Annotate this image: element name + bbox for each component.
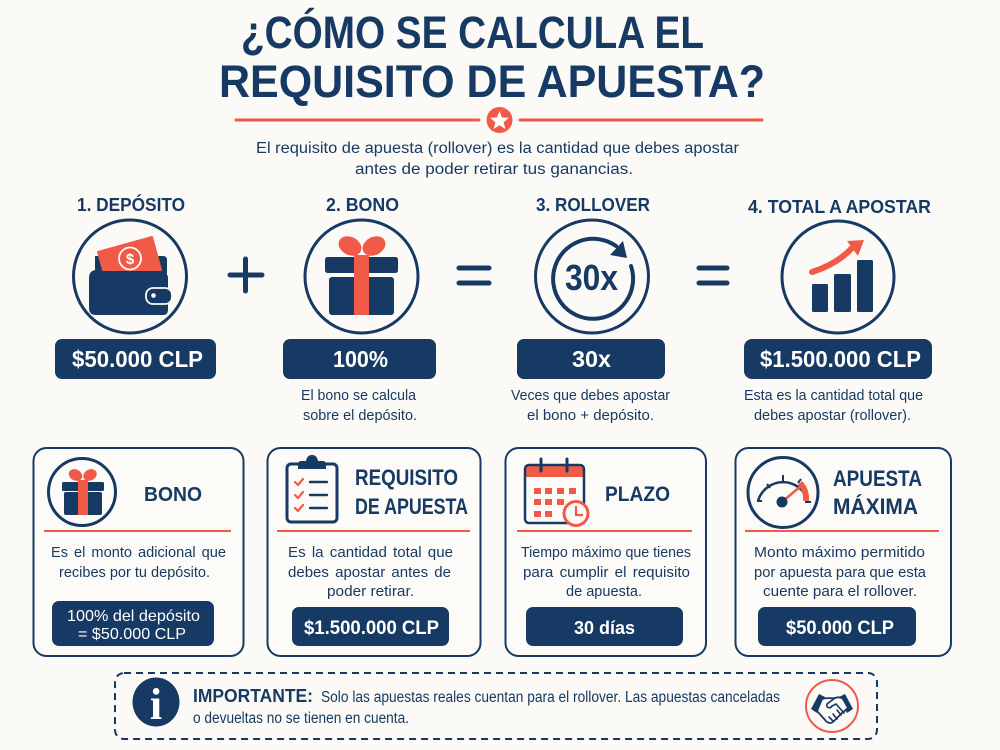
important text bbox=[193, 686, 780, 727]
step 1 value pill bbox=[55, 339, 216, 379]
step 4 caption bbox=[744, 387, 923, 424]
card text: plazo: de apuesta. bbox=[566, 583, 642, 600]
step 3: rollover bbox=[511, 195, 670, 424]
card text: requisito de apuesta bbox=[288, 544, 453, 600]
icon: gauge bbox=[748, 458, 818, 528]
step 2 heading: 2. BONO bbox=[326, 195, 399, 215]
card value pill: requisito: $1.500.000 CLP bbox=[304, 618, 439, 639]
equals sign 2 bbox=[699, 268, 727, 283]
card heading: apuesta máxima: APUESTA bbox=[833, 466, 922, 491]
step 1 heading: 1. DEPÓSITO bbox=[77, 194, 185, 215]
card text: apuesta máxima bbox=[754, 544, 927, 600]
card text: plazo bbox=[521, 544, 691, 600]
step 4 value pill bbox=[744, 339, 932, 379]
important text: Solo las apuestas reales cuentan para el rollover. Las apuestas canceladas bbox=[321, 689, 780, 706]
step 1: depósito bbox=[55, 194, 216, 379]
card text: apuesta máxima: por apuesta para que esta bbox=[754, 564, 927, 581]
icon: calendar with clock bbox=[525, 459, 588, 526]
title: REQUISITO DE APUESTA? bbox=[219, 56, 765, 107]
card heading: apuesta máxima: MÁXIMA bbox=[833, 494, 918, 519]
panel: requisito de apuesta bbox=[268, 448, 480, 656]
step 4 heading: 4. TOTAL A APOSTAR bbox=[748, 197, 931, 217]
icon: growth chart bbox=[782, 221, 894, 333]
intro text: antes de poder retirar tus ganancias. bbox=[355, 161, 633, 178]
card text: bono bbox=[51, 544, 226, 581]
card heading: requisito de apuesta: REQUISITO bbox=[355, 465, 458, 490]
card value pill: bono: 100% del depósito bbox=[67, 608, 200, 625]
step 4 caption: Esta es la cantidad total que bbox=[744, 387, 923, 404]
card text: apuesta máxima: cuente para el rollover. bbox=[763, 583, 917, 600]
step 2 caption: El bono se calcula bbox=[301, 387, 417, 404]
card value pill: apuesta máxima bbox=[758, 607, 916, 646]
card text: requisito de apuesta: Es la cantidad total que bbox=[288, 544, 453, 561]
icon: info: i bbox=[150, 680, 162, 729]
card text: requisito de apuesta: poder retirar. bbox=[327, 583, 414, 600]
important text: IMPORTANTE: bbox=[193, 686, 313, 706]
step 2 value pill: 100% bbox=[333, 346, 388, 372]
icon: rollover 30x bbox=[536, 220, 648, 333]
card value pill: plazo bbox=[526, 607, 683, 646]
card text: requisito de apuesta: debes apostar antes de bbox=[288, 564, 451, 581]
icon: gift bbox=[305, 220, 418, 333]
card value pill: plazo: 30 días bbox=[574, 618, 635, 638]
panel: apuesta máxima bbox=[736, 448, 951, 656]
intro text: El requisito de apuesta (rollover) es la cantidad que debes apostar bbox=[256, 140, 739, 157]
card value pill: bono: = $50.000 CLP bbox=[78, 626, 186, 643]
step 3 caption: el bono + depósito. bbox=[527, 407, 654, 424]
step 4: total a apostar bbox=[744, 197, 932, 424]
card heading: plazo: PLAZO bbox=[605, 483, 670, 506]
step 2 caption: sobre el depósito. bbox=[303, 407, 417, 424]
important text: o devueltas no se tienen en cuenta. bbox=[193, 710, 409, 727]
icon: info bbox=[132, 678, 180, 729]
card value pill: apuesta máxima: $50.000 CLP bbox=[786, 618, 894, 639]
card heading: apuesta máxima bbox=[833, 466, 922, 519]
step 3 value pill: 30x bbox=[572, 346, 611, 372]
step 4 caption: debes apostar (rollover). bbox=[754, 407, 911, 424]
icon: gift small bbox=[48, 458, 116, 526]
title bbox=[219, 7, 765, 107]
step 1 value pill: $50.000 CLP bbox=[72, 346, 203, 372]
card value pill: requisito bbox=[292, 607, 449, 646]
step 2 value pill bbox=[283, 339, 436, 379]
callout: importante bbox=[115, 673, 877, 739]
card text: plazo: Tiempo máximo que tienes bbox=[521, 544, 691, 561]
title divider with star bbox=[236, 107, 762, 133]
icon: wallet: $ bbox=[126, 251, 135, 268]
card heading: requisito de apuesta bbox=[355, 465, 468, 519]
intro text bbox=[256, 140, 739, 178]
step 3 caption: Veces que debes apostar bbox=[511, 387, 670, 404]
step 4 value pill: $1.500.000 CLP bbox=[760, 346, 921, 372]
panel: plazo bbox=[506, 448, 706, 656]
equals sign 1 bbox=[459, 268, 489, 283]
plus sign bbox=[230, 259, 262, 291]
step 3 heading: 3. ROLLOVER bbox=[536, 195, 650, 215]
step 2 caption bbox=[301, 387, 417, 424]
card heading: bono: BONO bbox=[144, 484, 202, 506]
card heading: requisito de apuesta: DE APUESTA bbox=[355, 494, 468, 519]
card text: bono: Es el monto adicional que bbox=[51, 544, 226, 561]
step 3 caption bbox=[511, 387, 670, 424]
step 3 value pill bbox=[517, 339, 665, 379]
card value pill: bono bbox=[52, 601, 214, 646]
icon: clipboard bbox=[287, 455, 337, 522]
card text: plazo: para cumplir el requisito bbox=[523, 564, 690, 581]
icon: rollover 30x: 30x bbox=[565, 257, 618, 298]
step 2: bono bbox=[283, 195, 436, 424]
title: ¿CÓMO SE CALCULA EL bbox=[241, 7, 704, 58]
panel: bono bbox=[34, 448, 244, 656]
card text: bono: recibes por tu depósito. bbox=[59, 564, 210, 581]
icon: wallet bbox=[74, 220, 186, 333]
card text: apuesta máxima: Monto máximo permitido bbox=[754, 544, 925, 561]
icon: handshake bbox=[806, 680, 858, 732]
